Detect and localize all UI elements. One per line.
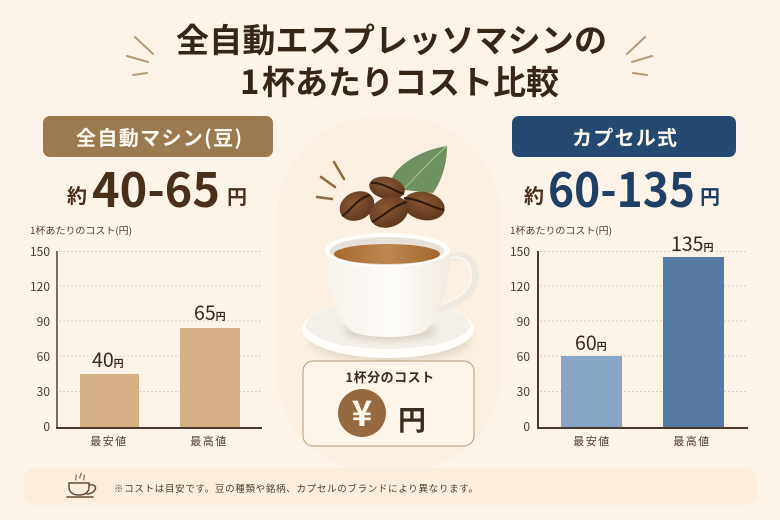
title accent left xyxy=(127,37,153,75)
x labels xyxy=(90,433,228,449)
y axis labels: 30 xyxy=(517,383,530,400)
icon: yen coin: ¥ xyxy=(352,386,373,437)
price: full-auto machine: 約 xyxy=(67,180,87,209)
y axis labels: 150 xyxy=(510,243,530,260)
callout: cost per cup: 円 xyxy=(398,399,426,439)
bar: highest xyxy=(180,328,240,427)
y axis labels xyxy=(30,243,50,435)
icon: small cup xyxy=(67,473,96,497)
y axis labels xyxy=(510,243,530,435)
value: 60: 60円 xyxy=(575,327,607,356)
title: 杯あたりコスト比較 xyxy=(262,56,559,104)
y axis labels: 60 xyxy=(37,348,50,365)
icon: coffee beans xyxy=(335,173,447,233)
value: 65: 65円 xyxy=(194,297,226,326)
y axis labels: 150 xyxy=(30,243,50,260)
bar: lowest xyxy=(561,356,622,427)
y axis labels: 0 xyxy=(43,418,50,435)
y axis labels: 120 xyxy=(30,278,50,295)
bar: lowest xyxy=(80,374,139,427)
title accent right xyxy=(627,37,652,75)
icon: coffee cup xyxy=(325,233,475,337)
icon: leaf xyxy=(392,146,447,193)
y axis labels: 0 xyxy=(523,418,530,435)
y axis labels: 30 xyxy=(37,383,50,400)
bar chart: full-auto machine xyxy=(30,223,262,449)
value: 135: 135円 xyxy=(671,228,713,257)
title xyxy=(176,14,607,104)
price: capsule: 円 xyxy=(700,181,720,210)
y axis labels: 120 xyxy=(510,278,530,295)
label: full-auto machine: 全自動マシン(豆) xyxy=(76,122,242,151)
title: 1 xyxy=(240,56,259,104)
bar chart: capsule xyxy=(510,223,748,449)
label: capsule xyxy=(512,116,736,157)
label: full-auto machine xyxy=(43,116,273,157)
footer note xyxy=(24,468,757,505)
callout: cost per cup: 1杯分のコスト xyxy=(345,367,435,386)
icon: saucer xyxy=(302,300,474,362)
x labels: 最高値 xyxy=(190,433,228,449)
y axis labels: 90 xyxy=(517,313,530,330)
price: full-auto machine: 40-65 xyxy=(92,152,220,221)
price: capsule: 60-135 xyxy=(548,152,695,221)
x labels: 最高値 xyxy=(673,433,711,449)
panel: center background xyxy=(277,117,501,472)
value: 40: 40円 xyxy=(92,344,124,373)
title: 全自動エスプレッソマシンの xyxy=(176,14,607,62)
y axis labels: 60 xyxy=(517,348,530,365)
icon: yen coin xyxy=(338,386,386,437)
axis title: 1杯あたりのコスト(円) xyxy=(510,223,612,237)
price: capsule: 約 xyxy=(524,180,544,209)
x labels: 最安値 xyxy=(573,433,611,449)
footer note: ※コストは目安です。豆の種類や銘柄、カプセルのブランドにより異なります。 xyxy=(114,481,478,495)
price: full-auto machine: 円 xyxy=(227,181,247,210)
x labels xyxy=(573,433,711,449)
x labels: 最安値 xyxy=(90,433,128,449)
label: capsule: カプセル式 xyxy=(572,122,677,151)
y axis labels: 90 xyxy=(37,313,50,330)
axis title: 1杯あたりのコスト(円) xyxy=(30,223,132,237)
callout: cost per cup xyxy=(303,361,474,446)
bar: highest xyxy=(663,257,724,427)
icon: sparkle lines xyxy=(317,162,344,199)
